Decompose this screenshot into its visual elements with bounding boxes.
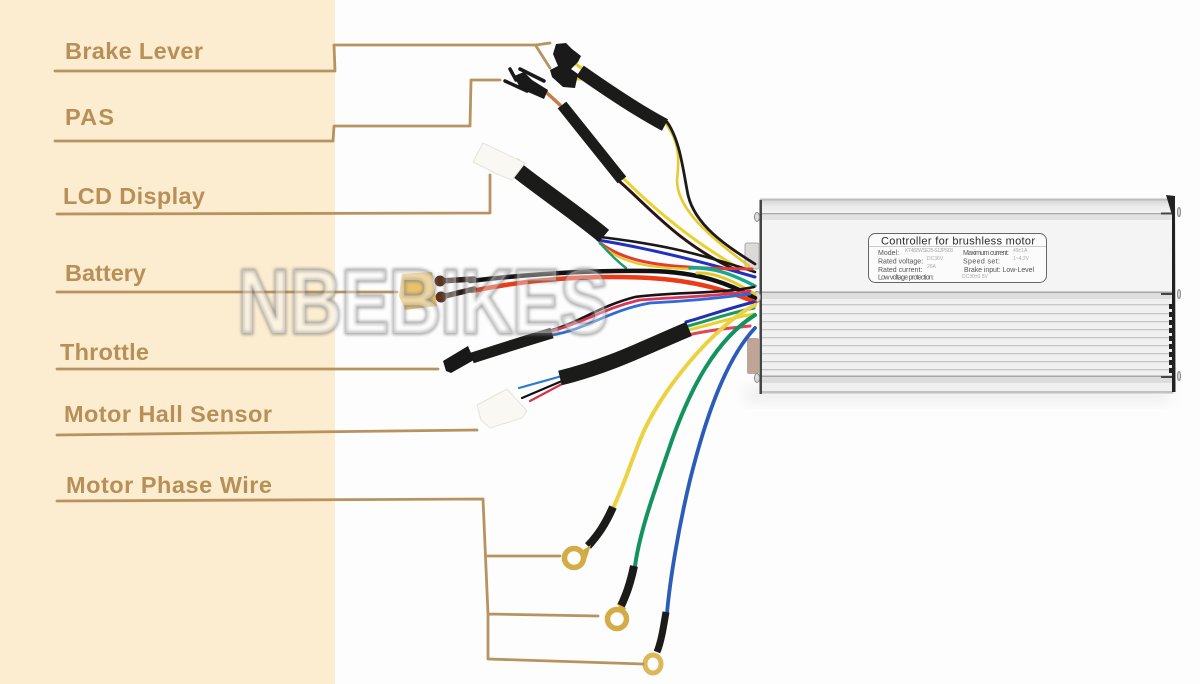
XT connector <box>399 272 437 310</box>
controller spec label: 1~4.2V <box>1013 256 1030 262</box>
wires: battery <box>399 271 755 310</box>
leader: brake lever <box>55 43 550 71</box>
controller spec label: Maximum current: <box>963 250 1009 257</box>
controller spec label: 49±1A <box>1013 248 1028 254</box>
leader: PAS <box>55 80 500 141</box>
label: brake lever: Brake Lever <box>65 38 203 64</box>
end plates <box>760 200 762 394</box>
label: motor hall sensor: Motor Hall Sensor <box>64 401 272 427</box>
controller box <box>754 195 1180 394</box>
wires: brake lever <box>550 43 755 266</box>
phase wire: blue <box>645 328 755 673</box>
leader: battery <box>57 291 397 293</box>
label: battery: Battery <box>65 260 146 286</box>
heat shrink <box>472 333 552 358</box>
heat shrink <box>562 105 622 180</box>
panel: label column <box>0 0 335 684</box>
controller shadow <box>745 388 1170 402</box>
heat-sink ribs <box>762 304 1170 370</box>
label: motor phase wire: Motor Phase Wire <box>66 472 272 498</box>
phase wire: yellow <box>564 305 755 568</box>
label: throttle: Throttle <box>60 339 149 365</box>
leader: throttle <box>57 368 438 370</box>
controller spec label: Rated voltage: <box>878 258 923 266</box>
controller spec label: Speed set: <box>963 258 1000 266</box>
wires: LCD display <box>473 143 755 286</box>
watermark: NBEBIKES <box>238 252 608 353</box>
screws <box>754 208 1180 382</box>
connector <box>505 69 544 91</box>
label: PAS: PAS <box>65 104 114 130</box>
heat shrink <box>560 329 689 378</box>
leader: motor phase wire <box>57 499 643 664</box>
controller spec label: DC30±0.5V <box>962 274 988 280</box>
white connector <box>477 389 527 428</box>
controller spec label: Controller for brushless motor <box>881 236 1035 248</box>
heat shrink <box>517 170 604 236</box>
controller spec label <box>868 234 1046 282</box>
watermark: NBEBIKES <box>238 252 608 353</box>
connector <box>443 346 474 373</box>
controller spec label: KT48ZWSE25-S12PS03 <box>905 248 953 254</box>
terminals <box>440 279 474 281</box>
controller spec label: Low voltage protection: <box>878 274 934 282</box>
phase wire: green <box>608 315 755 628</box>
leader: motor hall sensor <box>57 430 477 435</box>
label: LCD display: LCD Display <box>63 183 205 209</box>
heat shrink <box>580 71 665 125</box>
connector <box>550 43 581 88</box>
controller spec label: DC36V <box>927 256 944 262</box>
controller spec label: Brake input: Low-Level <box>964 267 1034 274</box>
leader: LCD display <box>57 175 490 214</box>
wires: PAS <box>505 69 739 271</box>
white connector <box>473 143 525 180</box>
controller mounting plate <box>745 243 759 374</box>
wires: motor hall sensor <box>477 302 754 428</box>
controller spec label: 26A <box>927 264 937 270</box>
wires: throttle <box>443 287 754 373</box>
controller spec label: Model: <box>878 250 899 257</box>
controller spec label: Rated current: <box>878 267 922 274</box>
